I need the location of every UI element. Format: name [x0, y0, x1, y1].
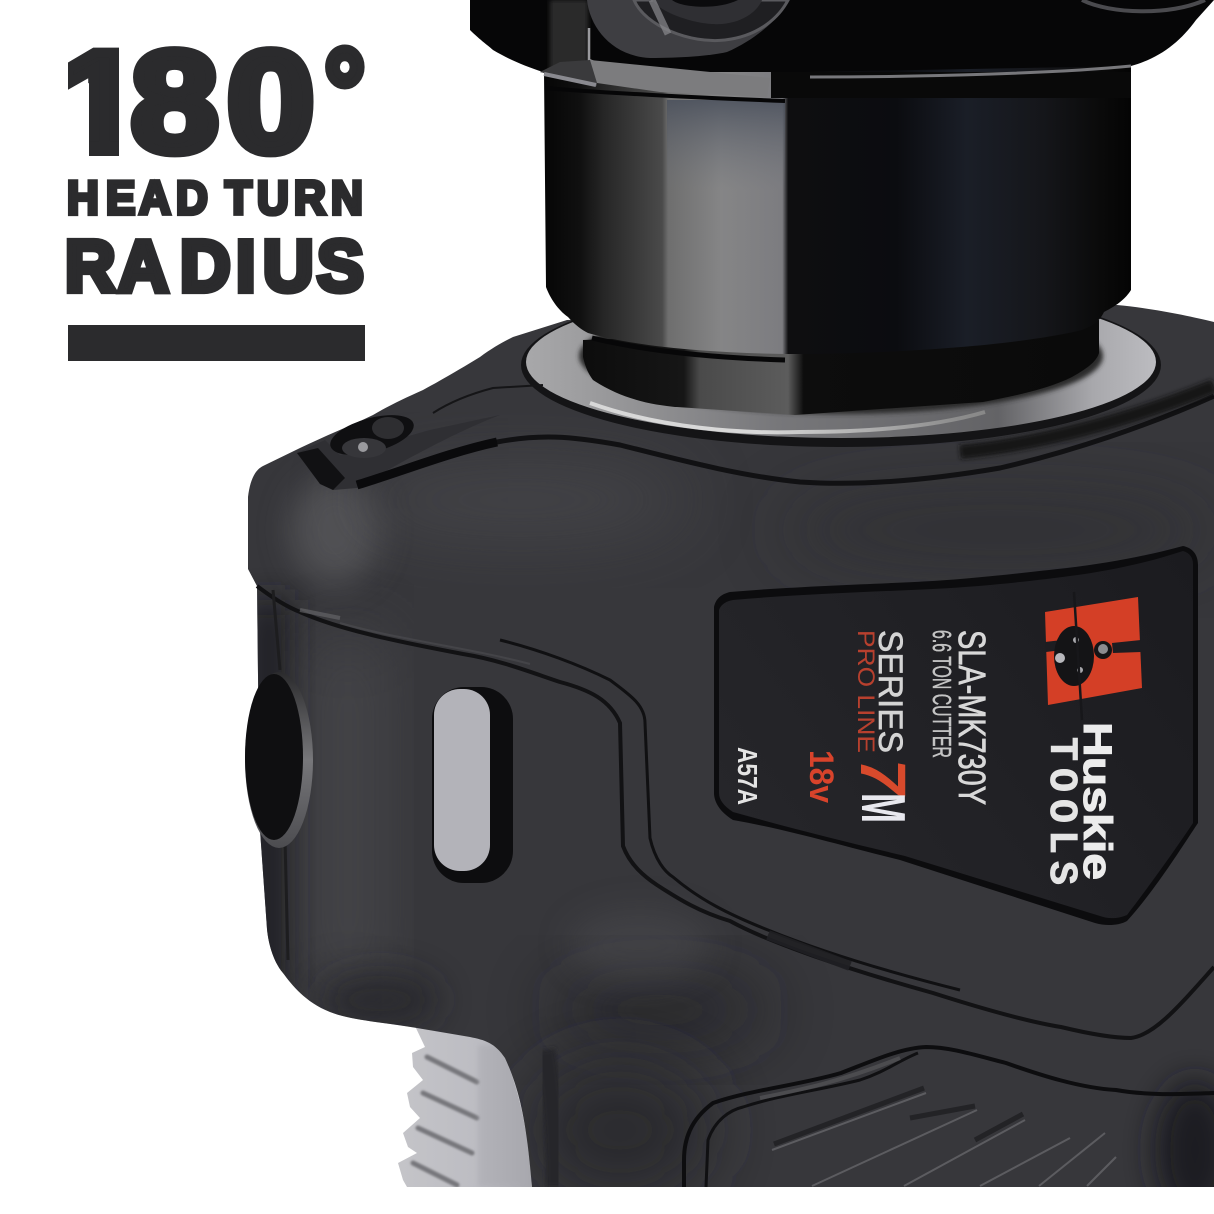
grip: grey ribbed handle — [398, 1026, 532, 1187]
Huskie Tools logo — [1038, 592, 1142, 885]
brand name: Huskie — [1075, 722, 1119, 880]
accent bar under title — [68, 325, 365, 361]
cylinder: polished swivel barrel — [540, 60, 1131, 415]
latch: small bolt recess on top — [297, 385, 543, 490]
code: A57A — [732, 747, 763, 805]
subheading: radius: RADIUS — [65, 227, 364, 307]
subheading: head turn: HEAD TURN — [67, 171, 363, 224]
headline digit zero: 0 — [227, 22, 314, 181]
label panel: product badge — [714, 546, 1198, 925]
voltage: 18v — [802, 750, 840, 803]
degree sign: ° — [324, 24, 366, 158]
tool head: black top section — [470, 0, 1214, 85]
button: round side button — [245, 672, 313, 848]
slot: trigger indicator window — [432, 687, 513, 883]
swivel ring: silver collar — [521, 283, 1161, 447]
lower pad: textured grip panel — [684, 1047, 1214, 1187]
husky emblem — [1054, 592, 1112, 720]
body rim: dark groove around the collar — [357, 396, 1214, 484]
lower white margin — [0, 1187, 1214, 1214]
brand name second line: TOOLS — [1038, 737, 1083, 885]
title: 180 degree head turn radius — [66, 44, 365, 295]
series name: SERIES — [871, 630, 909, 753]
seam: moulded line with parallel band — [257, 586, 1214, 1038]
headline digit eight: 8 — [131, 22, 218, 181]
side seam line — [273, 590, 288, 960]
model description: 6.6 TON CUTTER — [927, 630, 957, 758]
series seven: 7 — [847, 759, 919, 797]
bolt on the head — [587, 0, 790, 63]
pro line: PRO LINE — [852, 630, 879, 753]
headline digit one: 1 — [57, 22, 144, 181]
series M: M — [848, 793, 917, 823]
main body housing — [248, 305, 1214, 1214]
collar band under head — [540, 60, 770, 97]
model number: SLA-MK730Y — [950, 630, 992, 805]
right step shadow under the collar — [960, 386, 1214, 452]
